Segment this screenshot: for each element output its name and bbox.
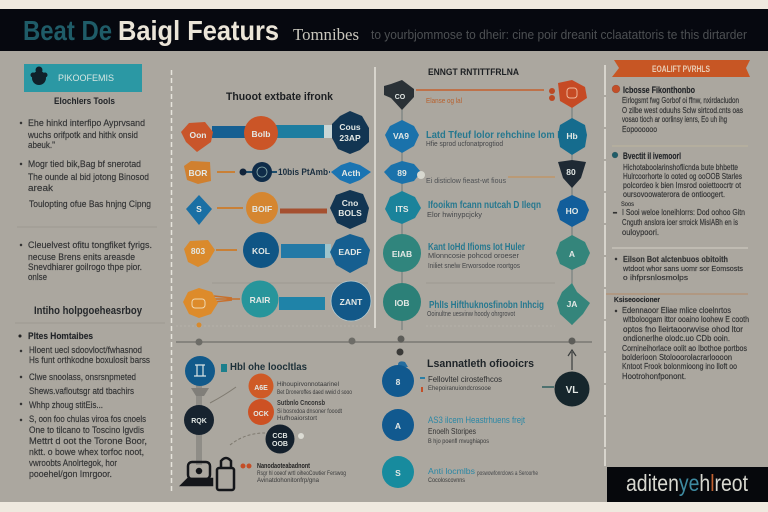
- panel: right-centre chart: [383, 67, 590, 330]
- item 1: Fellovltel cirostefhcos: [428, 375, 502, 384]
- text block: bullets 1: Toulopting ofue Bas hnjng Cipng: [29, 199, 151, 209]
- row 3: [384, 160, 586, 188]
- item 2: B hjo poenfl mvughiapos: [428, 438, 490, 445]
- node: dark: [184, 405, 214, 435]
- item 3: Anti locmlbs: [428, 466, 475, 476]
- row 5: Iniliet snelw Erworsodoe roortgos: [428, 263, 520, 270]
- text block: bullets 1: wuchs orifpotk and hithk onsid: [27, 130, 138, 140]
- item 2: AS3 ilcem Heastrhuens frejt: [428, 415, 525, 425]
- text block 1: Eirlogsmt fwg Gorbof oi ffnw, nxirdacludon: [622, 96, 739, 105]
- row 4: KOL: [252, 246, 270, 256]
- row 4: Elor hwinypcjcky: [427, 212, 483, 219]
- row 2: Hb: [566, 131, 578, 141]
- text block: bullets 2: necuse Brens enits areasde: [28, 252, 135, 262]
- item 3: poswowfonrclows a Seroorhe: [477, 471, 539, 477]
- footer logo box: aditenyehlreot: [626, 470, 749, 496]
- row 2: BOR: [189, 168, 207, 178]
- item 3: S: [395, 468, 401, 478]
- item 3: OOB: [272, 441, 288, 448]
- text block: bullets 3: Mettrt d oot the Torone Boor,: [29, 436, 147, 446]
- node: blue: [185, 356, 215, 386]
- row 5: [183, 280, 371, 328]
- row 3: [186, 190, 369, 229]
- icon: laptop and lock: [182, 458, 234, 490]
- text block: bullets 3: S, oon foo chulas viroa fos cnoels: [29, 414, 146, 424]
- text block: bullets 1: The ounde al bid jotong Binosod: [28, 172, 149, 182]
- footer logo box: [607, 467, 768, 502]
- row 1: Bolb: [252, 129, 270, 139]
- item 1: [382, 365, 502, 397]
- item 2: Enoelh Storipes: [428, 427, 476, 436]
- header band: Baigl Featurs: [118, 15, 279, 46]
- heading: Lsannatleth ofiooicrs: [427, 358, 534, 370]
- text block 4: [614, 297, 749, 381]
- panel: right column: [606, 60, 750, 381]
- heading: Thuoot extbate ifronk: [226, 91, 334, 103]
- panel: centre comparison chart: [181, 91, 371, 328]
- row 5: Mlonncosie pohcod oroeser: [428, 253, 520, 260]
- row 3: S: [196, 204, 202, 214]
- row 2: [184, 161, 371, 184]
- text block: bullets 3: One to tilcano to Toscino lgvdis: [29, 425, 144, 435]
- row 6: [383, 283, 590, 325]
- text block: bullets 1: Ehe hinkd interfipo Ayprvsand: [28, 118, 145, 128]
- text block 3: wtdoot whor sans uomr sor Eomsosts: [622, 264, 743, 273]
- title: Beat De: [23, 15, 112, 46]
- item 2: Si bosrxdoa dnsoner fooodt: [277, 408, 342, 415]
- row 5: EIAB: [392, 249, 412, 259]
- text block 2: ouloypoori.: [622, 228, 659, 237]
- item 1: Ehepoiranuiondcrosooe: [428, 385, 491, 392]
- text block: bullets 3: Pltes Homtaibes: [28, 331, 93, 341]
- row 1: CO: [395, 94, 406, 101]
- node: dark with arrow: VL: [566, 385, 578, 396]
- item 1: 8: [396, 377, 401, 387]
- text block: bullets 3: Hs funt orthkodne boxulosit barss: [29, 355, 150, 365]
- text block 2: Soos: [621, 201, 635, 208]
- text block: bullets 3: pooehel/gon Imrgoor.: [29, 469, 112, 479]
- text block 1: Icbosse Fikonthonbo: [623, 85, 695, 95]
- text block: bullets 3: vwroobts Anolrtegok, hor: [29, 458, 117, 468]
- row 4: ITS: [395, 204, 409, 214]
- text block: Rsgr hl ooeof wrtl oiheoCowtier Ferswog: [257, 471, 346, 477]
- text block 4: wltboloogam ittor ooaino loohew E cooth: [622, 315, 749, 324]
- row 1: Cous: [339, 122, 361, 132]
- row 4: [385, 191, 589, 227]
- row 2: [385, 118, 587, 155]
- ribbon heading: [612, 60, 750, 77]
- row 3: 89: [397, 168, 407, 178]
- header band: Tomnibes: [293, 25, 359, 44]
- text block: bullets 3: Shews.vafloutsgr atd tbachirs: [29, 386, 134, 396]
- row 5: ZANT: [340, 297, 363, 307]
- text block 2: [612, 151, 745, 237]
- banner: teal heading: [24, 64, 142, 92]
- item 2: Hufhoaiorstort: [277, 415, 317, 422]
- heading: Intiho holpgoeheasrboy: [34, 305, 143, 317]
- row 1: [384, 80, 587, 110]
- row 1: Elanse og lal: [426, 96, 462, 105]
- node: dark with arrow: [542, 350, 590, 406]
- text block: bullets 1: abeuk.": [28, 140, 55, 150]
- text block: bullets 1: areak: [28, 183, 54, 193]
- item 2: Sutbnlo Cnconsb: [277, 400, 325, 407]
- row 6: Ooinultne uesvinw hoody ohrgrovot: [427, 311, 515, 318]
- item 2: [382, 409, 525, 445]
- row 1: Oon: [190, 130, 206, 140]
- text block 1: [612, 85, 743, 134]
- text block 2: I Sooi weloe loneihlorrs: Dod oohoo Gitn: [622, 208, 745, 217]
- row 4: [184, 232, 370, 273]
- row 2: Acth: [342, 168, 360, 178]
- row 1: [181, 111, 369, 154]
- text block 4: ondionerlhe olodc.uo CDb ooin.: [623, 334, 730, 343]
- text block 4: optos fno lleirtaoorwvise ohod ltor: [623, 325, 743, 334]
- row 3: Cno: [342, 198, 358, 208]
- item 3: [382, 456, 539, 488]
- row 4: Ifooikm fcann nutcah D Ileqn: [428, 199, 541, 211]
- row 5: [383, 234, 590, 272]
- text block 2: Hulrcoorhorte lo ooted og ooOOB Starles: [623, 172, 742, 181]
- text block: bullets 2: Cleuelvest ofitu tongfiket fyrigs.: [28, 240, 152, 250]
- panel: bottom-left timeline: [182, 356, 352, 490]
- row 6: IOB: [394, 298, 410, 308]
- item 3: CCB: [272, 433, 288, 440]
- row 3: BOIF: [252, 204, 272, 214]
- panel: bottom-right list: [382, 350, 590, 488]
- item 3: [230, 424, 304, 454]
- text block: bullets 3: Clwe snoolass, onsrsnpmeted: [29, 372, 136, 382]
- text block 3: Eilson Bot alctenbuos obitoith: [623, 254, 728, 264]
- subheading: Elochlers Tools: [54, 96, 115, 106]
- text block 1: vosao tioch ar oorlinsy ienrs, Eo uh ihg: [622, 115, 727, 124]
- text block 2: Cnguth anslora ioer srroick MislABh en is: [622, 218, 738, 227]
- ribbon heading: EOALIFT PVRHLS: [652, 64, 710, 74]
- text block: bullets 2: Snevdhiarer goilrogo thpe pior.: [28, 262, 142, 272]
- item 1: A6E: [254, 385, 268, 392]
- text block 1: O zilbe west oduuhs Sclw sirtcod.cnts oas: [622, 106, 743, 115]
- text block 2: Bvectit iI ivemoorl: [623, 151, 681, 161]
- row 5: Kant IoHd Ifioms Iot Huler: [428, 241, 525, 253]
- text block: bullets 1: [20, 118, 151, 209]
- heading: Hbl ohe loocltlas: [230, 361, 307, 373]
- text block: bullets 3: Whhp zhoug stitEis...: [29, 400, 103, 410]
- panel dividers: [172, 65, 605, 492]
- text block 2: polcordeo k bien Imsrod ooiettoocrtr ot: [623, 181, 742, 190]
- text block: bullets 3: Hloent uecl sdoovloct/fwhasnod: [29, 345, 142, 355]
- text block 3: o ihfprsnlosmolps: [623, 273, 688, 282]
- row 5: RAIR: [250, 295, 270, 305]
- row 2: VA9: [393, 131, 409, 141]
- text block: bullets 2: [20, 240, 152, 282]
- text block 1: Eopoooooo: [622, 125, 657, 134]
- text block: bullets 2: onlse: [28, 272, 47, 282]
- header band: [0, 9, 768, 51]
- banner: teal heading: PIKOOFEMIS: [58, 73, 114, 83]
- text block 2: oursovoowaterora de ontioogert.: [623, 190, 725, 199]
- text block 4: Hootrohonfponont.: [622, 372, 686, 381]
- node: dark: RQK: [191, 418, 207, 425]
- text block: [240, 463, 346, 484]
- row 4: 803: [191, 246, 205, 256]
- text block 4: Ksiseoocioner: [614, 297, 660, 304]
- item 2: [248, 399, 342, 425]
- text block: bullets 3: [18, 331, 150, 479]
- text block: bullets 1: Mogr tied bik,Bag bf snerotad: [28, 159, 141, 169]
- text block 3: [615, 254, 743, 282]
- row 3: BOLS: [338, 208, 362, 218]
- text block 4: bolderioon Stolooorolacrarloooon: [622, 353, 732, 362]
- row 3: Ei disticlow fieast-wt fious: [426, 178, 507, 185]
- text block 2: Hichotaboolarinshoflicnda bute bhbette: [623, 163, 738, 172]
- row 5: A: [569, 249, 575, 259]
- text block 4: Cornineihorlace oolit ao Ibothoe portbos: [622, 344, 747, 353]
- row 6: PhlIs Hifthuknosfinobn Inhcig: [429, 299, 544, 311]
- item 1: Bet Droneroffes daed wwid d sooo: [277, 389, 352, 396]
- row 4: EADF: [338, 247, 362, 257]
- item 1: [210, 374, 352, 403]
- row 2: 10bis PtAmb: [278, 167, 328, 177]
- heading: ENNGT RNTITTFRLNA: [428, 67, 519, 77]
- item 2: OCK: [253, 411, 269, 418]
- row 4: HO: [566, 206, 579, 216]
- row 2: Hfie sprod ucfonatprogtiod: [426, 141, 503, 148]
- item 3: Cocoloscovnns: [428, 477, 466, 484]
- text block 4: Edennaoor Eliae mlice cloelnrtos: [622, 306, 731, 315]
- text block: bullets 3: nktt. o bowe whex torfoc noot,: [29, 447, 144, 457]
- panel: left column: [15, 64, 165, 479]
- row 1: 23AP: [339, 133, 361, 143]
- row 3: 80: [566, 167, 576, 177]
- row 2: Latd Tfeuf lolor rehchine lom B: [426, 129, 564, 141]
- text block: Avinatdohonitonfrp/gna: [257, 478, 320, 484]
- item 1: Hihoupirvonnotaarinel: [277, 381, 340, 388]
- item 2: A: [395, 421, 401, 431]
- row 6: JA: [567, 299, 577, 309]
- text block: Nanodaoteabadnont: [257, 463, 311, 470]
- text block 4: Kntoot Frook bolonmioong ino lloft oo: [622, 362, 737, 371]
